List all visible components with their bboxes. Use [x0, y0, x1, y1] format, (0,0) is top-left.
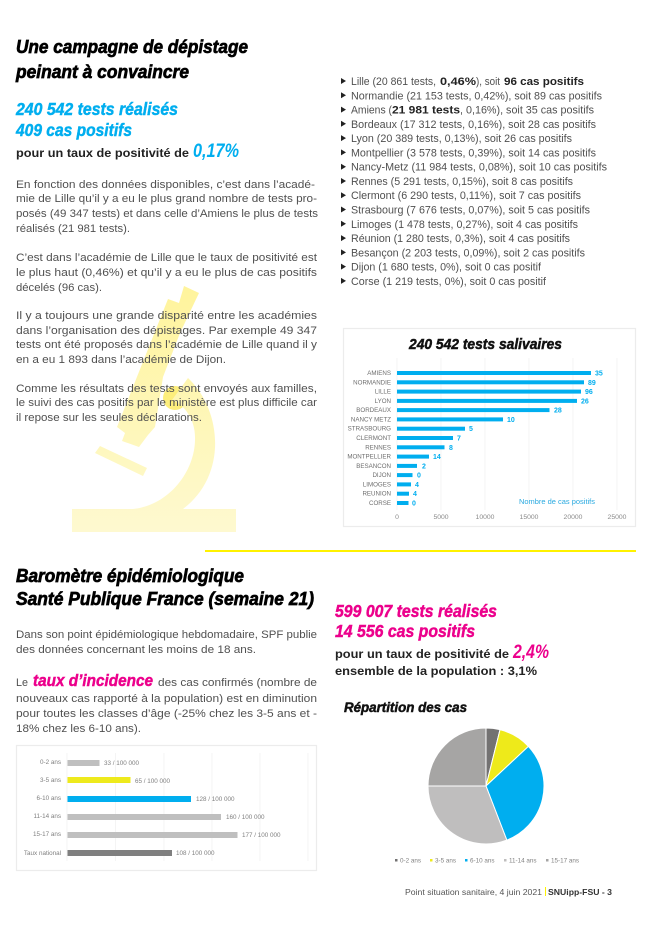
text block: analyse des académies: Comme les résultats des tests sont envoyés aux familles, — [16, 383, 317, 395]
text block: taux d'incidence: nouveaux cas rapporté à la population) est en diminution — [16, 693, 317, 705]
académie labels — [347, 370, 392, 507]
list: résultats par académie: Besançon (2 203 tests, 0,09%), soit 2 cas positifs — [351, 247, 585, 259]
title: baromètre épidémiologique: Baromètre épidémiologique — [16, 565, 244, 586]
académie labels: STRASBOURG — [348, 426, 391, 433]
heading: répartition des cas: Répartition des cas — [344, 700, 467, 715]
case counts: 5 — [469, 426, 473, 433]
case counts: 14 — [433, 454, 441, 461]
académie labels: BORDEAUX — [356, 407, 391, 414]
case counts: 26 — [581, 398, 589, 405]
key figures: population générale: pour un taux de positivité de — [335, 647, 509, 661]
académie labels: AMIENS — [367, 370, 391, 377]
text block: taux d'incidence: taux d’incidence — [33, 672, 153, 690]
key figures: tests salivaires: 240 542 tests réalisés — [15, 99, 178, 119]
text block: analyse des académies: réalisés (21 981 tests). — [16, 223, 130, 235]
list: résultats par académie: ), soit — [476, 76, 501, 88]
text block: analyse des académies: le plus haut (0,46%) et qu’il y a eu le plus de cas positifs — [16, 267, 317, 279]
académie labels: CORSE — [369, 500, 391, 507]
académie labels: LIMOGES — [363, 481, 391, 488]
title: campagne de dépistage: peinant à convaincre — [15, 61, 189, 82]
académie labels: LYON — [375, 398, 391, 405]
chart title: 240 542 tests salivaires — [408, 336, 562, 353]
list: résultats par académie: 0,46% — [440, 76, 476, 88]
axis ticks: 15000 — [520, 514, 539, 521]
text block: analyse des académies: posés (49 347 tests) et dans celle d’Amiens le plus de tests — [16, 208, 318, 220]
pie legend — [395, 858, 579, 864]
age labels: Taux national — [24, 850, 61, 857]
list: résultats par académie: Dijon (1 680 tests, 0%), soit 0 cas positif — [351, 262, 542, 274]
list: résultats par académie: Rennes (5 291 tests, 0,15%), soit 8 cas positifs — [351, 176, 573, 188]
académie labels: DIJON — [372, 472, 391, 479]
bars — [68, 760, 238, 856]
académie labels: REUNION — [362, 491, 391, 498]
key figures: population générale: 14 556 cas positifs — [335, 621, 475, 641]
pie chart: répartition des cas — [428, 728, 544, 844]
list: résultats par académie — [341, 76, 607, 288]
text block: taux d'incidence: Le — [16, 677, 28, 689]
académie labels: NANCY METZ — [351, 416, 391, 423]
text block: taux d'incidence: des données concernant les moins de 18 ans. — [16, 644, 256, 656]
académie labels: CLERMONT — [356, 435, 391, 442]
key figures: population générale: 599 007 tests réalisés — [335, 601, 497, 621]
case counts: 28 — [554, 408, 562, 415]
pie legend: 3-5 ans — [435, 858, 456, 864]
text block: analyse des académies: En fonction des données disponibles, c’est dans l’acadé- — [16, 179, 315, 191]
title: baromètre épidémiologique — [16, 565, 314, 609]
footer: Point situation sanitaire, 4 juin 2021 — [405, 887, 542, 897]
text block: analyse des académies: tests ont été proposés dans l’académie de Lille quand il y — [16, 339, 317, 351]
text block: taux d'incidence: Dans son point épidémiologique hebdomadaire, SPF publie — [16, 629, 317, 641]
rate values: 160 / 100 000 — [226, 814, 265, 821]
footer — [405, 887, 612, 897]
pie legend: 15-17 ans — [551, 858, 579, 864]
rate values: 33 / 100 000 — [104, 760, 140, 767]
text block: analyse des académies — [16, 179, 318, 424]
list: résultats par académie: Normandie (21 153 tests, 0,42%), soit 89 cas positifs — [351, 90, 602, 102]
case counts: 89 — [588, 380, 596, 387]
case counts: 4 — [413, 491, 417, 498]
list: résultats par académie: Strasbourg (7 676 tests, 0,07%), soit 5 cas positifs — [351, 204, 590, 216]
list: résultats par académie: Limoges (1 478 tests, 0,27%), soit 4 cas positifs — [351, 219, 578, 231]
title: campagne de dépistage — [15, 36, 248, 82]
text block: taux d'incidence: pour toutes les classes d’âge (-25% chez les 3-5 ans et - — [16, 708, 317, 720]
axis ticks: 5000 — [433, 514, 449, 521]
age labels: 3-5 ans — [40, 777, 61, 784]
age labels: 11-14 ans — [33, 813, 61, 820]
axis ticks: 25000 — [608, 514, 627, 521]
case counts: 0 — [417, 473, 421, 480]
text block: taux d'incidence — [16, 629, 317, 735]
axis ticks: 10000 — [476, 514, 495, 521]
bar chart: tests salivaires par académie — [344, 328, 636, 526]
key figures: population générale: ensemble de la population : 3,1% — [335, 664, 538, 678]
title: campagne de dépistage: Une campagne de dépistage — [16, 36, 248, 57]
axis ticks: 0 — [395, 514, 399, 521]
legend note: Nombre de cas positifs — [519, 497, 595, 506]
list: résultats par académie: 21 981 tests — [392, 105, 460, 117]
list: résultats par académie: Clermont (6 290 tests, 0,11%), soit 7 cas positifs — [351, 190, 581, 202]
title: baromètre épidémiologique: Santé Publique France (semaine 21) — [16, 588, 314, 609]
case counts: 0 — [412, 500, 416, 508]
footer: SNUipp-FSU - 3 — [548, 887, 612, 897]
case counts: 2 — [422, 463, 426, 470]
case counts: 96 — [585, 389, 593, 396]
age labels — [24, 759, 61, 857]
axis ticks — [395, 514, 627, 521]
pie legend: 11-14 ans — [509, 858, 537, 864]
rate values: 108 / 100 000 — [176, 850, 215, 857]
list: résultats par académie: Réunion (1 280 tests, 0,3%), soit 4 cas positifs — [351, 233, 570, 245]
age labels: 6-10 ans — [36, 795, 61, 802]
case counts: 35 — [595, 370, 603, 378]
académie labels: NORMANDIE — [353, 379, 391, 386]
list: résultats par académie: Amiens ( — [351, 105, 392, 117]
rate values: 177 / 100 000 — [242, 832, 281, 839]
key figures: tests salivaires: 0,17% — [193, 140, 239, 162]
académie labels: MONTPELLIER — [347, 454, 392, 461]
text block: analyse des académies: dans l’organisation des dépistages. Par exemple 49 347 — [16, 325, 317, 337]
text block: analyse des académies: mie de Lille qu’il y a eu le plus grand nombre de tests pro- — [16, 193, 317, 205]
text block: taux d'incidence: 18% chez les 6-10 ans). — [16, 723, 141, 735]
académie labels: RENNES — [365, 444, 391, 451]
rate values: 128 / 100 000 — [196, 796, 235, 803]
list: résultats par académie: Lyon (20 389 tests, 0,13%), soit 26 cas positifs — [351, 133, 572, 145]
bar chart: taux d'incidence par âge — [16, 746, 316, 870]
text block: analyse des académies: Il y a toujours une grande disparité entre les académies — [16, 310, 317, 322]
case counts: 4 — [415, 482, 419, 489]
text block: analyse des académies: le suivi des cas positifs par le ministère est plus difficile car — [16, 397, 317, 409]
list: résultats par académie: , 0,16%), soit 35 cas positifs — [460, 105, 594, 117]
list: résultats par académie: Nancy-Metz (11 984 tests, 0,08%), soit 10 cas positifs — [351, 162, 607, 174]
age labels: 0-2 ans — [40, 759, 61, 766]
key figures: tests salivaires: pour un taux de positivité de — [16, 146, 189, 160]
key figures: population générale: 2,4% — [512, 641, 549, 663]
text block: taux d'incidence: des cas confirmés (nombre de — [158, 677, 317, 689]
académie labels: BESANCON — [356, 463, 391, 470]
list: résultats par académie: 96 cas positifs — [504, 76, 584, 88]
icon: microscope watermark — [72, 286, 236, 532]
case counts: 10 — [507, 417, 515, 424]
text block: analyse des académies: en a eu 1 893 dans l’académie de Dijon. — [16, 354, 226, 366]
text block: analyse des académies: C’est dans l’académie de Lille que le taux de positivité est — [16, 252, 318, 264]
rate values — [104, 760, 281, 857]
text block: analyse des académies: il repose sur les seules déclarations. — [16, 412, 202, 424]
key figures: tests salivaires: 409 cas positifs — [15, 120, 132, 140]
bars — [397, 371, 591, 505]
list: résultats par académie: Lille (20 861 tests, — [351, 76, 436, 88]
list: résultats par académie: Corse (1 219 tests, 0%), soit 0 cas positif — [351, 276, 547, 288]
case counts — [412, 370, 603, 508]
pie legend: 6-10 ans — [470, 858, 495, 864]
key figures: tests salivaires — [15, 99, 239, 162]
académie labels: LILLE — [375, 389, 391, 396]
text block: analyse des académies: décelés (96 cas). — [16, 282, 102, 294]
rate values: 65 / 100 000 — [135, 778, 171, 785]
pie legend: 0-2 ans — [400, 858, 421, 864]
axis ticks: 20000 — [564, 514, 583, 521]
key figures: population générale — [335, 601, 549, 678]
list: résultats par académie: Bordeaux (17 312 tests, 0,16%), soit 28 cas positifs — [351, 119, 596, 131]
case counts: 8 — [449, 445, 453, 452]
age labels: 15-17 ans — [33, 831, 61, 838]
case counts: 7 — [457, 436, 461, 442]
list: résultats par académie: Montpellier (3 578 tests, 0,39%), soit 14 cas positifs — [351, 147, 596, 159]
